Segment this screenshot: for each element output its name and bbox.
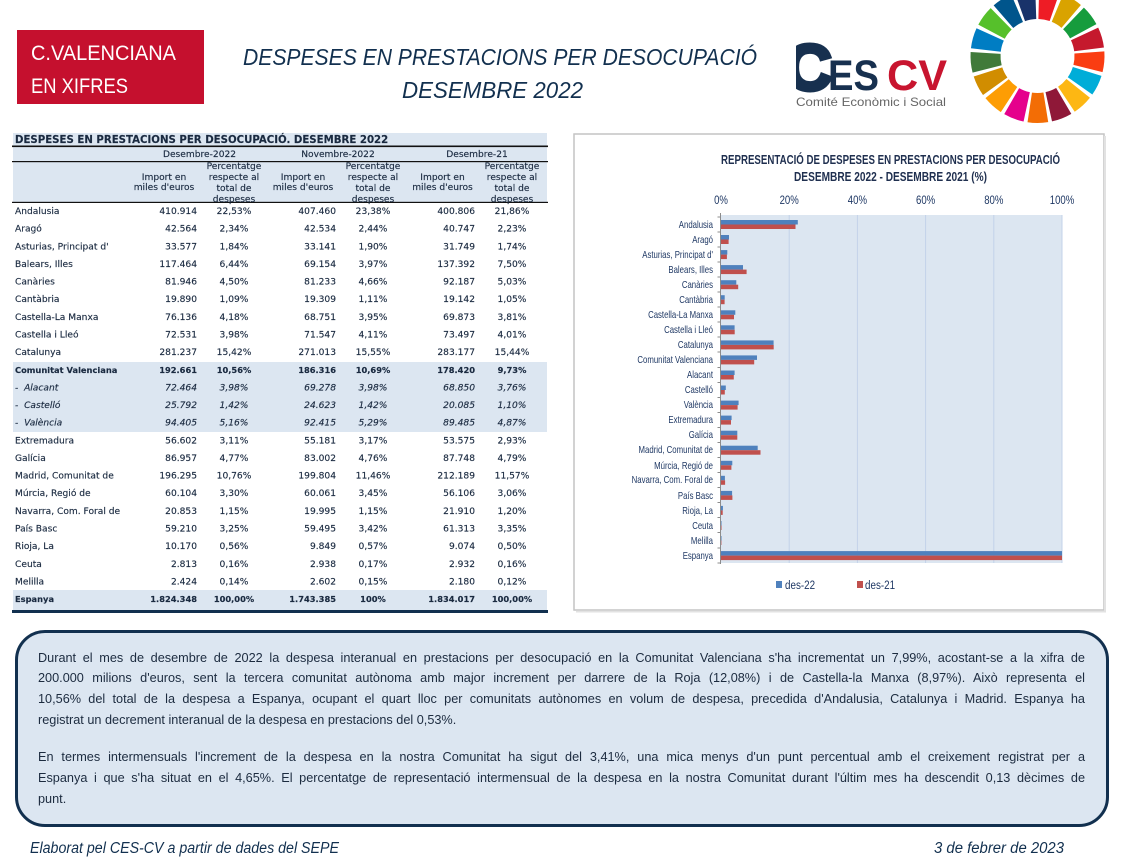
table rows: 1,84% [220,242,249,252]
table rows: 186.316 [298,365,336,375]
table rows: 92.187 [443,278,475,288]
table rows: 60.104 [165,489,197,499]
table column headers: despeses [352,195,395,205]
table rows: 11,46% [356,472,391,482]
table rows: 31.749 [443,242,475,252]
table rows: 0,14% [220,577,249,587]
main title: DESEMBRE 2022 [402,77,583,103]
table rows: Cantàbria [15,295,59,305]
footer source note: Elaborat pel CES-CV a partir de dades del SEPE [30,840,340,857]
table rows: 83.002 [304,454,336,464]
main title [243,44,757,103]
table rows: 3,25% [220,524,249,534]
paragraph 2: En termes intermensuals l'increment de la despesa en la nostra Comunitat ha sigut del 3,41%, una mica menys d'un punt percentual amb el creixement registrat per a [38,750,1085,764]
table rows: 94.405 [165,419,197,429]
table rows: 81.233 [304,278,336,288]
category labels: Balears, Illes [668,264,713,275]
category labels: Ceuta [692,520,713,531]
legend: des-22 [785,579,815,592]
table rows: 92.415 [304,419,336,429]
table rows: Aragó [15,224,42,235]
category labels: Andalusia [679,219,713,230]
table column headers: Desembre-21 [446,150,508,160]
table rows: 0,12% [498,577,527,587]
x axis labels: 20% [780,194,799,207]
table rows: 55.181 [304,436,336,446]
chart title: DESEMBRE 2022 - DESEMBRE 2021 (%) [794,170,987,184]
table rows: Espanya [15,594,54,604]
table column headers: Percentatge [485,162,540,172]
category labels: Rioja, La [682,505,713,516]
table rows: 3,76% [498,383,526,393]
table rows: 1,90% [359,242,388,252]
table rows: 2.424 [171,577,197,587]
category labels [632,219,713,561]
table rows: 3,81% [498,313,527,323]
table rows: 0,56% [220,542,249,552]
table rows: 3,35% [498,524,527,534]
table rows: 21.910 [443,507,475,517]
table rows: 2.180 [449,577,475,587]
table column headers: despeses [491,195,534,205]
table rows: 73.497 [443,330,475,340]
category labels: Castella i Lleó [664,324,713,335]
category labels: Canàries [682,279,713,290]
table column headers [134,150,540,205]
table rows: 9,73% [498,365,527,375]
table column headers: miles d'euros [273,183,334,193]
category labels: Múrcia, Regió de [654,460,713,471]
paragraph 1: 200.000 milions d'euros, sent la tercera comunitat autònoma amb major increment per darrere de la Roja (12,08%) i de Castella-la Manxa (8,97%). Això representa el [38,671,1085,685]
table rows: 69.873 [443,313,475,323]
table rows: 100% [360,594,386,604]
table rows: 178.420 [437,365,475,375]
category labels: País Basc [678,490,713,501]
table rows: 10,76% [217,472,252,482]
table rows: 2.602 [310,577,336,587]
x axis labels: 100% [1050,194,1075,207]
table rows: 1,15% [220,507,249,517]
table rows: Balears, Illes [15,260,73,270]
table rows: Melilla [15,577,44,587]
footer date: 3 de febrer de 2023 [934,840,1064,857]
table rows: 3,98% [220,330,249,340]
header badge: C.Valenciana en xifres: C.VALENCIANA [31,42,176,65]
table rows: 5,29% [359,419,387,429]
table rows: 1,20% [498,507,527,517]
table rows: 407.460 [298,207,336,217]
paragraph 1: 10,56% del total de la despesa a Espanya, ocupant el quart lloc per comunitats autònomes en volum de despesa, precedida d'Andalusia, Catalunya i Madrid. Espanya ha [38,692,1085,706]
table rows: 100,00% [492,594,533,604]
table rows: - Castelló [15,400,61,411]
category labels: Castella-La Manxa [648,309,713,320]
table rows: 56.602 [165,436,197,446]
x axis labels: 40% [848,194,867,207]
table rows: 6,44% [220,260,249,270]
table rows: 4,79% [498,454,527,464]
table rows: Galícia [15,454,46,464]
table rows: 2,93% [498,436,527,446]
table title: DESPESES EN PRESTACIONS PER DESOCUPACIÓ. DESEMBRE 2022 [15,133,388,146]
table rows: 2.813 [171,560,197,570]
table rows: 3,95% [359,313,388,323]
table column headers: respecte al [348,173,398,183]
table rows: 19.142 [443,295,475,305]
x axis labels: 0% [714,194,728,207]
category labels: València [684,399,713,410]
table rows: 71.547 [304,330,336,340]
table rows: 3,42% [359,524,388,534]
header badge: C.Valenciana en xifres: EN XIFRES [31,75,128,98]
table rows: 2,34% [220,225,249,235]
table rows: Canàries [15,278,55,288]
table rows: 281.237 [159,348,197,358]
legend: des-21 [865,579,895,592]
table rows: 60.061 [304,489,336,499]
table rows: 22,53% [217,207,252,217]
table column headers: miles d'euros [412,183,473,193]
header badge: C.Valenciana en xifres [17,30,204,104]
table rows: 1.824.348 [150,594,197,604]
table rows: 1.834.017 [428,594,475,604]
table rows: 7,50% [498,260,527,270]
category labels: Madrid, Comunitat de [639,444,713,455]
table rows: 4,01% [498,330,527,340]
bars [721,220,1062,560]
table rows: 0,16% [220,560,249,570]
x axis labels: 60% [916,194,935,207]
table rows: 3,98% [220,383,248,393]
table rows: 15,44% [495,348,530,358]
chart title [721,152,1060,184]
table rows: 192.661 [159,365,197,375]
table rows: 10.170 [165,542,197,552]
paragraph 2: Espanya i que s'ha situat en el 4,65%. El percentatge de representació intermensual de la despesa en la nostra Comunitat durant l'últim mes ha descendit 0,13 dècimes de [38,771,1085,785]
category labels: Castelló [685,384,713,395]
table rows: 3,17% [359,436,388,446]
table rows: 72.464 [165,383,197,393]
paragraph 1: Durant el mes de desembre de 2022 la despesa interanual en prestacions per desocupació en la Comunitat Valenciana s'ha incrementat un 7,99%, acostant-se a la xifra de [38,651,1085,665]
category labels: Aragó [692,234,713,245]
table rows: Ceuta [15,560,42,570]
table rows: - València [15,418,62,429]
table rows: Extremadura [15,436,74,446]
table rows: 23,38% [356,207,391,217]
table rows: 1,11% [359,295,388,305]
table rows: 1,10% [498,401,526,411]
table rows: 20.853 [165,507,197,517]
table rows: 76.136 [165,313,197,323]
table rows: 4,18% [220,313,249,323]
table rows: 21,86% [495,207,530,217]
table column headers: Percentatge [207,162,262,172]
table rows: 68.751 [304,313,336,323]
table rows: Andalusia [15,207,59,217]
table rows: 0,15% [359,577,388,587]
table rows: 137.392 [437,260,475,270]
table rows: 68.850 [443,383,475,393]
table rows: 199.804 [298,472,336,482]
paragraph 2: punt. [38,792,66,806]
table column headers: Desembre-2022 [163,150,236,160]
table rows: Madrid, Comunitat de [15,472,114,482]
table rows: 59.495 [304,524,336,534]
table rows: 19.309 [304,295,336,305]
table rows: 283.177 [437,348,475,358]
table rows: 42.564 [165,225,197,235]
category labels: Catalunya [678,339,713,350]
table rows: 1,42% [359,401,387,411]
table rows: 0,57% [359,542,388,552]
panel: data table [12,133,548,613]
category labels: Espanya [683,550,713,561]
table rows: 4,66% [359,278,388,288]
table rows: 19.890 [165,295,197,305]
table rows: 89.485 [443,419,475,429]
table rows: 4,77% [220,454,249,464]
table column headers: total de [216,184,252,194]
table rows: 15,55% [356,348,391,358]
table rows: 86.957 [165,454,197,464]
table rows: 42.534 [304,225,336,235]
table rows: 3,98% [359,383,387,393]
table rows: 3,30% [220,489,249,499]
table rows: 3,97% [359,260,388,270]
table column headers: respecte al [487,173,537,183]
table rows: Asturias, Principat d' [15,242,109,252]
table rows: 59.210 [165,524,197,534]
category labels: Asturias, Principat d' [642,249,713,260]
table rows: 1,15% [359,507,388,517]
table rows: 3,11% [220,436,249,446]
table rows: 2,23% [498,225,527,235]
table rows: 4,11% [359,330,388,340]
table rows [15,207,533,604]
table rows: 5,03% [498,278,527,288]
table rows: 1,05% [498,295,527,305]
table rows: 15,42% [217,348,252,358]
x axis labels [714,194,1075,207]
logo: CES-CV [796,42,947,106]
table rows: 2.938 [310,560,336,570]
table rows: 33.141 [304,242,336,252]
table column headers: Import en [142,173,186,183]
table rows: 0,50% [498,542,527,552]
category labels: Comunitat Valenciana [637,354,713,365]
table column headers: miles d'euros [134,183,195,193]
table rows: 2.932 [449,560,475,570]
table rows: 9.074 [449,542,475,552]
table rows: 81.946 [165,278,197,288]
paragraph 1: registrat un decrement interanual de la despesa en prestacions del 0,53%. [38,713,456,727]
table rows: 271.013 [298,348,336,358]
paragraph 1 [38,651,1085,727]
table rows: 87.748 [443,454,475,464]
category labels: Alacant [687,369,713,380]
table rows: 10,56% [217,365,252,375]
table rows: Castella-La Manxa [15,313,98,323]
table rows: 5,16% [220,419,248,429]
table column headers: Import en [281,173,325,183]
table column headers: total de [355,184,391,194]
logo: CES-CV: ES [828,52,879,100]
table rows: 1,42% [220,401,248,411]
table rows: 9.849 [310,542,336,552]
table column headers: Import en [420,173,465,183]
table rows: 10,69% [356,365,391,375]
logo: CES-CV: C [785,31,832,104]
main title: DESPESES EN PRESTACIONS PER DESOCUPACIÓ [243,44,757,70]
table rows: 0,17% [359,560,388,570]
table rows: 4,50% [220,278,249,288]
table rows: Múrcia, Regió de [15,488,91,499]
table rows: 53.575 [443,436,475,446]
paragraph 2 [38,750,1086,806]
table rows: 69.154 [304,260,336,270]
table rows: 100,00% [214,594,255,604]
table rows: 196.295 [159,472,197,482]
table rows: 4,76% [359,454,388,464]
icon: SDG colour wheel [964,0,1111,130]
table rows: 3,45% [359,489,388,499]
table column headers: Novembre-2022 [301,150,375,160]
category labels: Cantàbria [679,294,713,305]
logo: CES-CV: CV [887,52,947,100]
panel: commentary text [15,630,1109,827]
table column headers: total de [494,184,530,194]
table rows: Castella i Lleó [15,330,79,340]
table column headers: Percentatge [346,162,401,172]
table rows: Rioja, La [15,542,54,552]
table column headers: respecte al [209,173,259,183]
category labels: Galícia [689,429,713,440]
table rows: 25.792 [165,401,197,411]
x axis labels: 80% [984,194,1004,207]
logo: CES-CV: Comité Econòmic i Social [796,95,946,109]
legend [776,579,895,592]
table rows: - Alacant [15,383,59,393]
table rows: 4,87% [498,419,526,429]
table rows: 69.278 [304,383,336,393]
table rows: 0,16% [498,560,527,570]
table rows: 11,57% [495,472,530,482]
table rows: 117.464 [159,260,197,270]
table rows: Navarra, Com. Foral de [15,507,121,517]
table rows: 20.085 [443,401,475,411]
table rows: 1,74% [498,242,527,252]
table rows: 56.106 [443,489,475,499]
table rows: País Basc [15,524,57,534]
table rows: 61.313 [443,524,475,534]
table rows: 1.743.385 [289,594,336,604]
table rows: 2,44% [359,225,388,235]
table rows: 3,06% [498,489,527,499]
category labels: Extremadura [668,414,713,425]
table rows: 410.914 [159,207,197,217]
category labels: Melilla [691,535,713,546]
table rows: Catalunya [15,348,61,358]
panel: bar chart [574,134,1106,612]
table rows: 19.995 [304,507,336,517]
table rows: 212.189 [437,472,475,482]
table rows: 72.531 [165,330,197,340]
table rows: 1,09% [220,295,249,305]
table rows: 24.623 [304,401,336,411]
table rows: 33.577 [165,242,197,252]
table column headers: despeses [213,195,256,205]
category labels: Navarra, Com. Foral de [632,474,713,485]
table rows: 40.747 [443,225,475,235]
table rows: 400.806 [437,207,475,217]
table rows: Comunitat Valenciana [15,365,117,375]
